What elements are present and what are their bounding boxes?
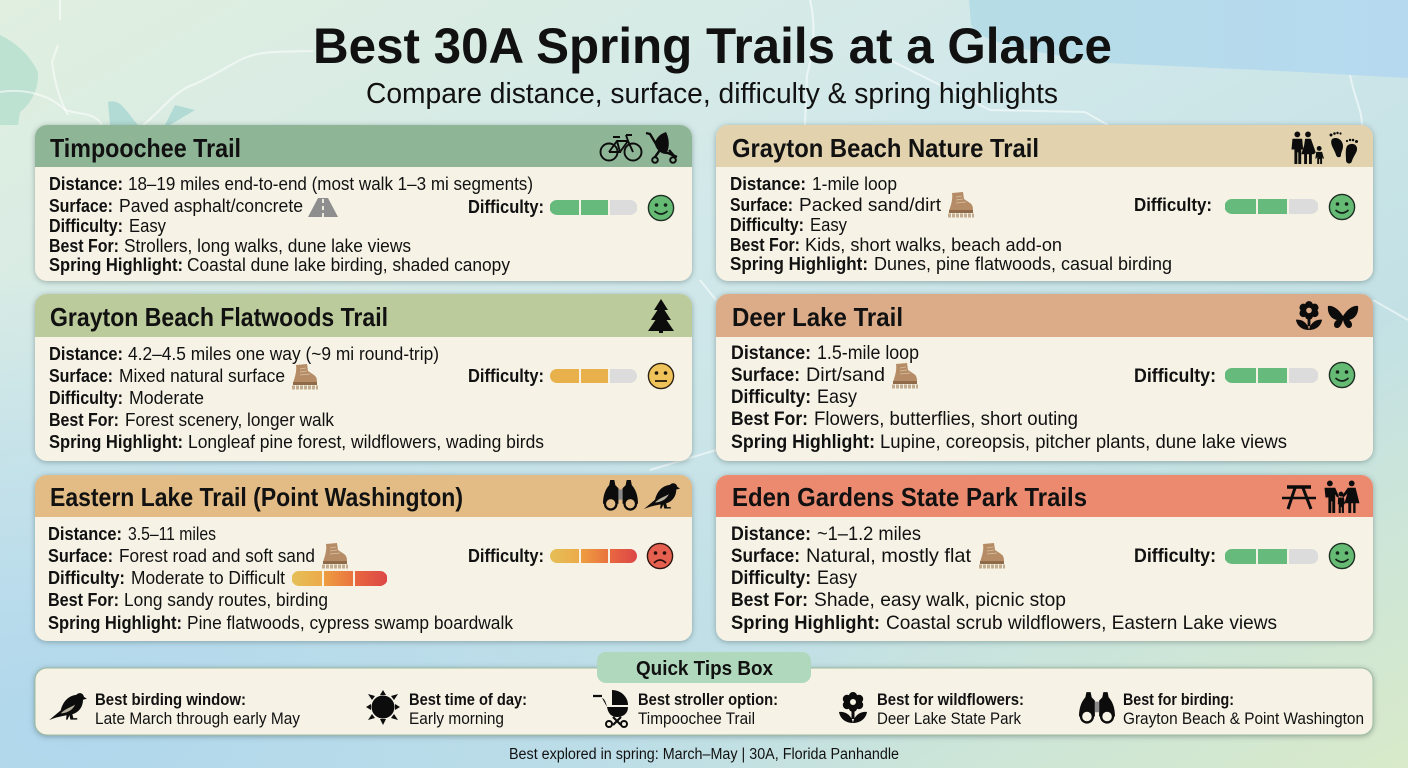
- text: best for: Strollers, long walks, dune lake views: [124, 236, 411, 256]
- icon: stroller: [646, 132, 677, 163]
- icon: flower: [839, 692, 867, 723]
- text: spring highlight: Longleaf pine forest, wildflowers, wading birds: [188, 432, 544, 452]
- text: difficulty: [49, 388, 204, 408]
- tip: stroller option: Timpoochee Trail: [638, 709, 755, 728]
- text: difficulty: Difficulty:: [48, 568, 125, 588]
- text: difficulty: Easy: [817, 567, 857, 589]
- difficulty meter: [1134, 362, 1355, 388]
- text: spring highlight: Spring Highlight:: [731, 431, 875, 453]
- tip: time of day: Best time of day:: [409, 690, 527, 709]
- text: spring highlight: Lupine, coreopsis, pitcher plants, dune lake views: [880, 431, 1287, 453]
- text: surface: Surface:: [731, 364, 800, 386]
- text: distance: [730, 174, 897, 194]
- text: surface: [731, 364, 885, 386]
- tip: birding window: [95, 690, 300, 728]
- icon: binoculars: [603, 480, 638, 510]
- text: surface: Surface:: [730, 195, 793, 215]
- card header: [716, 125, 1373, 167]
- icon: stroller: [593, 690, 628, 727]
- footer: Best explored in spring: March–May | 30A, Florida Panhandle: [509, 746, 899, 763]
- tip: birding: Grayton Beach & Point Washington: [1123, 709, 1364, 728]
- text: surface: Natural, mostly flat: [806, 545, 972, 567]
- text: difficulty: Moderate: [129, 388, 204, 408]
- text: best for: Long sandy routes, birding: [124, 590, 328, 610]
- icon: boot: [292, 364, 318, 388]
- text: distance: Distance:: [731, 342, 811, 364]
- text: distance: Distance:: [49, 344, 123, 364]
- text: best for: Best For:: [48, 590, 119, 610]
- difficulty meter: [468, 363, 674, 389]
- icon: family: [1325, 480, 1359, 513]
- quick tips heading: Quick Tips Box: [636, 658, 773, 680]
- text: distance: [48, 524, 216, 544]
- text: distance: [731, 523, 921, 545]
- text: surface: Surface:: [49, 196, 113, 216]
- panel: Grayton Beach Nature Trail: [716, 125, 1373, 281]
- icon: sun: [366, 690, 400, 725]
- text: distance: Distance:: [49, 174, 123, 194]
- text: spring highlight: Spring Highlight:: [730, 254, 868, 274]
- panel: Grayton Beach Flatwoods Trail: [35, 294, 692, 461]
- icon: footprints: [1330, 132, 1358, 164]
- panel: Deer Lake Trail: [716, 294, 1373, 461]
- tip: birding: Best for birding:: [1123, 690, 1234, 709]
- text: difficulty: Easy: [129, 216, 166, 236]
- text: best for: Shade, easy walk, picnic stop: [814, 589, 1066, 611]
- icon: binoculars: [1079, 692, 1115, 722]
- subtitle: Compare distance, surface, difficulty & spring highlights: [366, 78, 1058, 110]
- text: surface: [731, 545, 972, 567]
- severity bar: [292, 571, 388, 586]
- text: best for: Best For:: [731, 408, 808, 430]
- difficulty meter: Difficulty:: [468, 546, 544, 566]
- tip: birding window: Late March through early May: [95, 709, 300, 728]
- text: surface: Mixed natural surface: [119, 366, 285, 386]
- text: spring highlight: Pine flatwoods, cypress swamp boardwalk: [187, 613, 514, 633]
- text: spring highlight: [730, 254, 1172, 274]
- text: surface: Forest road and soft sand: [119, 546, 315, 566]
- text: best for: Forest scenery, longer walk: [125, 410, 335, 430]
- difficulty meter: Difficulty:: [468, 197, 544, 217]
- text: difficulty: Difficulty:: [730, 215, 804, 235]
- panel: quick tips: [35, 652, 1373, 735]
- text: surface: [49, 366, 285, 386]
- text: surface: Packed sand/dirt: [799, 195, 941, 215]
- icon: flower: [1296, 301, 1322, 330]
- tip: stroller option: [638, 690, 778, 728]
- text: distance: Distance:: [731, 523, 811, 545]
- text: distance: 4.2–4.5 miles one way (~9 mi round-trip): [128, 344, 439, 364]
- text: spring highlight: Dunes, pine flatwoods, casual birding: [874, 254, 1172, 274]
- text: distance: [731, 342, 919, 364]
- card header: [716, 294, 1373, 337]
- text: best for: Kids, short walks, beach add-on: [805, 235, 1062, 255]
- tip: time of day: Early morning: [409, 709, 504, 728]
- tip: wildflowers: Best for wildflowers:: [877, 690, 1024, 709]
- difficulty meter: [1134, 543, 1355, 569]
- text: surface: Surface:: [48, 546, 113, 566]
- difficulty meter: [1134, 194, 1355, 220]
- tip: wildflowers: [877, 690, 1024, 728]
- text: best for: Best For:: [730, 235, 800, 255]
- icon: pine tree: [648, 299, 674, 333]
- heading: Grayton Beach Nature Trail: [732, 133, 1039, 163]
- text: spring highlight: [49, 255, 510, 275]
- difficulty meter: Difficulty:: [1134, 365, 1216, 387]
- text: difficulty: Easy: [817, 386, 857, 408]
- text: distance: 1.5-mile loop: [817, 342, 919, 364]
- tip: wildflowers: Deer Lake State Park: [877, 709, 1021, 728]
- tip: time of day: [409, 690, 527, 728]
- text: surface: Surface:: [49, 366, 113, 386]
- card header: [35, 294, 692, 337]
- heading: Deer Lake Trail: [732, 302, 903, 332]
- icon: road: [308, 198, 338, 217]
- text: spring highlight: Spring Highlight:: [48, 613, 182, 633]
- text: best for: Best For:: [731, 589, 808, 611]
- text: surface: Surface:: [731, 545, 800, 567]
- text: spring highlight: Spring Highlight:: [49, 432, 183, 452]
- card header: [35, 125, 692, 167]
- difficulty meter: Difficulty:: [1134, 545, 1216, 567]
- text: distance: 1-mile loop: [812, 174, 897, 194]
- difficulty meter: Difficulty:: [468, 366, 544, 386]
- tip: stroller option: Best stroller option:: [638, 690, 778, 709]
- icon: boot: [979, 543, 1005, 566]
- text: distance: Distance:: [730, 174, 806, 194]
- text: spring highlight: Coastal scrub wildflowers, Eastern Lake views: [886, 612, 1277, 634]
- text: spring highlight: [48, 613, 514, 633]
- text: surface: Paved asphalt/concrete: [119, 196, 303, 216]
- text: spring highlight: Coastal dune lake birding, shaded canopy: [187, 255, 510, 275]
- text: distance: ~1–1.2 miles: [817, 523, 921, 545]
- card header: [716, 475, 1373, 517]
- text: spring highlight: Spring Highlight:: [731, 612, 880, 634]
- text: difficulty: Difficulty:: [731, 386, 811, 408]
- difficulty meter: [468, 543, 673, 569]
- icon: butterfly: [1328, 306, 1358, 328]
- text: surface: Dirt/sand: [806, 364, 885, 386]
- icon: picnic table: [1282, 487, 1316, 509]
- title: Best 30A Spring Trails at a Glance: [313, 18, 1112, 74]
- difficulty meter: Difficulty:: [1134, 195, 1212, 215]
- tip: birding: [1123, 690, 1364, 728]
- icon: boot: [892, 363, 918, 386]
- panel: Eastern Lake Trail: [35, 475, 692, 641]
- text: difficulty: Difficulty:: [731, 567, 811, 589]
- text: best for: Best For:: [49, 410, 119, 430]
- icon: family: [1292, 131, 1324, 164]
- icon: boot: [322, 543, 348, 566]
- difficulty meter: [468, 195, 674, 221]
- text: distance: 3.5–11 miles: [128, 524, 216, 544]
- text: best for: Flowers, butterflies, short outing: [814, 408, 1078, 430]
- icon: bicycle: [600, 135, 642, 160]
- heading: Timpoochee Trail: [50, 133, 241, 163]
- heading: Eastern Lake Trail (Point Washington): [50, 482, 463, 512]
- icon: bird: [644, 483, 680, 509]
- text: difficulty: Easy: [810, 215, 847, 235]
- icon: bird: [49, 693, 87, 720]
- text: difficulty: Moderate to Difficult: [131, 568, 285, 588]
- text: spring highlight: Spring Highlight:: [49, 255, 183, 275]
- text: distance: Distance:: [48, 524, 122, 544]
- text: difficulty: [48, 568, 285, 588]
- text: best for: Best For:: [49, 236, 119, 256]
- heading: Eden Gardens State Park Trails: [732, 482, 1087, 512]
- text: surface: [730, 195, 941, 215]
- quick tips heading: [597, 652, 811, 683]
- text: distance: 18–19 miles end-to-end (most walk 1–3 mi segments): [128, 174, 533, 194]
- icon: boot: [948, 192, 974, 216]
- text: difficulty: Difficulty:: [49, 216, 123, 236]
- tip: birding window: Best birding window:: [95, 690, 246, 709]
- panel: Eden Gardens State Park Trails: [716, 475, 1373, 641]
- text: difficulty: Difficulty:: [49, 388, 123, 408]
- panel: Timpoochee Trail: [35, 125, 692, 281]
- card header: [35, 475, 692, 517]
- heading: Grayton Beach Flatwoods Trail: [50, 302, 388, 332]
